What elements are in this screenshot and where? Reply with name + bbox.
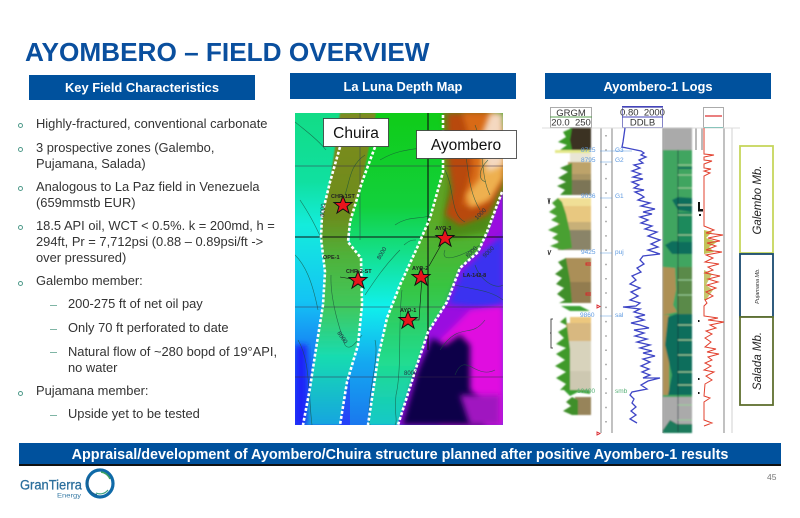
- box: Salada Mb.: Salada Mb.: [752, 332, 764, 390]
- panel: key field characteristics text: Pujamana member:: [36, 383, 148, 398]
- panel: key field characteristics text: Only 70 ft perforated to date: [68, 320, 229, 335]
- callout banner: [19, 443, 781, 466]
- well labels: CHR-1ST: [331, 194, 355, 200]
- formation brackets: [548, 198, 553, 348]
- box: Pujamana Mb.: Pujamana Mb.: [755, 268, 761, 304]
- depth markers: 9425: [581, 249, 596, 256]
- gamma ray track: [548, 128, 591, 415]
- log headers: GRGM: [556, 108, 586, 119]
- depth markers: 10400: [577, 388, 595, 395]
- contour labels: 9000: [482, 245, 496, 259]
- label: Ayombero: [416, 130, 516, 158]
- panel: key field characteristics text: Galembo member:: [36, 273, 143, 288]
- box: Galembo Mb.: Galembo Mb.: [752, 165, 764, 235]
- depth markers: puj: [615, 249, 624, 256]
- label: Ayombero: Ayombero: [431, 137, 501, 154]
- marker: red flags: [586, 263, 600, 435]
- depth markers: 9036: [581, 193, 596, 200]
- heading: key field characteristics: Key Field Characteristics: [65, 80, 219, 95]
- well labels: AYO-3: [435, 226, 451, 232]
- depth markers: G3: [615, 147, 624, 154]
- depth markers: 8795: [581, 157, 596, 164]
- depth markers: 8715: [581, 147, 596, 154]
- log headers: [550, 106, 724, 128]
- panel: key field characteristics text: 294ft, Pr = 7,712psi (0.88 – 0.89psi/ft ->: [36, 234, 263, 249]
- panel: key field characteristics text: 200-275 ft of net oil pay: [68, 296, 203, 311]
- heading: la luna depth map: La Luna Depth Map: [344, 79, 462, 94]
- lithology track: [663, 128, 692, 433]
- log track rails: [542, 128, 740, 433]
- panel: key field characteristics text: 18.5 API oil, WCT < 0.5%. k = 200md, h =: [36, 218, 275, 233]
- log headers: 0.80 2000: [620, 108, 665, 118]
- well labels: OPE-1: [323, 255, 340, 261]
- heading: key field characteristics: [29, 75, 255, 100]
- panel: key field characteristics text: Upside yet to be tested: [68, 406, 200, 421]
- log headers: DDLB: [630, 118, 655, 128]
- panel: key field characteristics text: over pressured): [36, 250, 126, 265]
- well labels: CHR-2-ST: [346, 269, 372, 275]
- log headers: 20.0 250: [551, 118, 591, 128]
- well labels: AYO-2: [412, 266, 428, 272]
- chart: la luna depth map: [20, 106, 774, 499]
- depth markers: G2: [615, 157, 624, 164]
- panel: key field characteristics text: Analogous to La Paz field in Venezuela: [36, 179, 260, 194]
- box: Salada Mb.: [740, 317, 773, 405]
- label: Chuira: [324, 118, 388, 146]
- core marks: [698, 202, 703, 394]
- panel: key field characteristics text: (659mmstb EUR): [36, 195, 136, 210]
- map base colours: [295, 113, 503, 425]
- depth markers: sal: [615, 312, 624, 319]
- resistivity curve: [622, 128, 660, 423]
- contour labels: 8000: [465, 245, 479, 259]
- map grid lines: [295, 113, 503, 377]
- well stars: [334, 196, 454, 328]
- contour labels: 8000: [320, 203, 327, 217]
- depth markers: G1: [615, 193, 624, 200]
- panel: key field characteristics text: no water: [68, 360, 117, 375]
- depth markers: 9860: [580, 312, 595, 319]
- box: Galembo Mb.: [740, 146, 773, 253]
- callout banner: Appraisal/development of Ayombero/Chuira structure planned after positive Ayombero-1 results: [72, 447, 728, 463]
- contour labels: 1000: [474, 207, 488, 221]
- page number: 45: [767, 472, 776, 482]
- depth ticks: [605, 135, 607, 430]
- panel: key field characteristics text: [18, 116, 277, 421]
- label: Chuira: Chuira: [333, 125, 379, 142]
- dotted fault outlines: [303, 115, 502, 425]
- heading: ayombero-1 logs: [545, 73, 771, 99]
- chart: ayombero-1 well logs: [542, 106, 773, 435]
- depth markers: smb: [615, 388, 628, 395]
- logo: GranTierra Energy: Energy: [57, 492, 82, 500]
- heading: ayombero-1 logs: Ayombero-1 Logs: [603, 79, 713, 94]
- title: AYOMBERO – FIELD OVERVIEW: [25, 37, 430, 67]
- contour labels: [320, 203, 496, 377]
- contour labels: 8000: [335, 331, 348, 346]
- contour labels: 8000: [377, 246, 389, 261]
- panel: key field characteristics text: Pujamana, Salada): [36, 156, 146, 171]
- shows curve: [704, 128, 724, 426]
- contour labels: 8000: [404, 371, 418, 377]
- depth markers: [577, 147, 632, 395]
- map contours: [295, 122, 503, 425]
- panel: key field characteristics text: Natural flow of ~280 bopd of 19°API,: [68, 344, 277, 359]
- well labels: LA-142-8: [463, 273, 486, 279]
- panel: key field characteristics text: Highly-fractured, conventional carbonate: [36, 116, 267, 131]
- logo: GranTierra Energy: GranTierra: [20, 478, 82, 492]
- box: Pujamana Mb.: [740, 254, 773, 317]
- well labels: AYO-1: [400, 308, 416, 314]
- panel: key field characteristics text: 3 prospective zones (Galembo,: [36, 140, 214, 155]
- heading: la luna depth map: [290, 73, 516, 99]
- well labels: [323, 194, 486, 314]
- logo: GranTierra Energy: [20, 470, 113, 500]
